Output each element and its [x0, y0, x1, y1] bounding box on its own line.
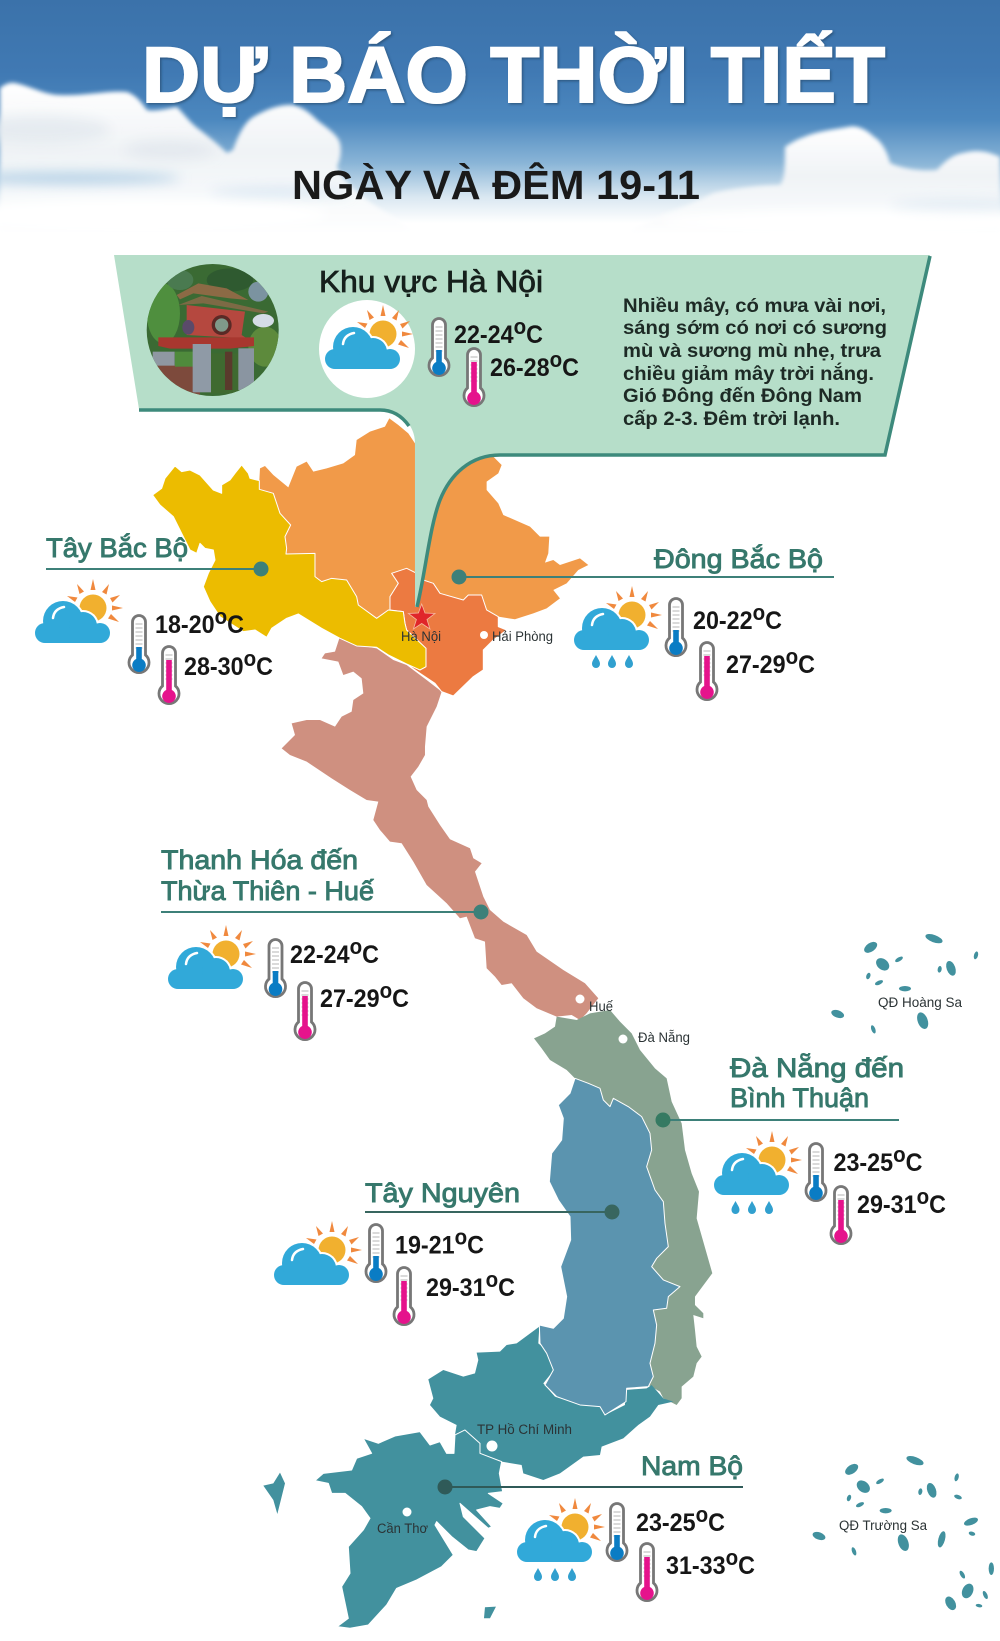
forecast description: sáng sớm có nơi có sương [623, 317, 887, 339]
temperature high: o [550, 347, 562, 372]
temperature low: o [753, 600, 765, 625]
temperature low: C [227, 611, 244, 639]
temperature low: o [696, 1502, 708, 1527]
heading line 2: Bình Thuận [730, 1083, 869, 1113]
city labels and markers [377, 629, 962, 1536]
temperature high: 29-31 [857, 1191, 921, 1219]
icon: cloud, sun and rain [574, 586, 662, 668]
region: Đông Nam Bộ [428, 1327, 673, 1480]
temperature low: 22-24 [290, 941, 354, 969]
temperature high: 27-29 [320, 985, 384, 1013]
island: Phú Quốc [263, 1473, 285, 1514]
region: Đông Bắc Bộ east [417, 457, 588, 619]
temperature low: o [215, 604, 227, 629]
temperature high: 31-33 [666, 1552, 730, 1580]
city labels and markers: Hà Nội [401, 629, 441, 644]
forecast description: Gió Đông đến Đông Nam [623, 385, 862, 407]
region: Tây Bắc Bộ [153, 465, 426, 670]
panel: Tây Nguyên [274, 1178, 620, 1325]
panel: Đà Nẵng đến Bình Thuận [656, 1052, 946, 1244]
icon: cloud, sun and rain [714, 1131, 802, 1214]
icon: cloud and sun [274, 1221, 362, 1285]
temperature low: C [765, 607, 782, 635]
temperature low: 23-25 [834, 1149, 897, 1177]
islands: Hoàng Sa [830, 932, 979, 1034]
thermometer: low [666, 598, 686, 656]
heading line 2: Thừa Thiên - Huế [161, 876, 374, 906]
title: DỰ BÁO THỜI TIẾT [142, 30, 885, 119]
temperature low: 19-21 [395, 1232, 459, 1260]
temperature low: 18-20 [155, 611, 219, 639]
region: Tây Nguyên [539, 1078, 680, 1415]
temperature high: 26-28 [490, 354, 554, 382]
icon: cloud, sun and rain [517, 1498, 605, 1581]
temperature low: o [455, 1224, 467, 1250]
temperature high: o [486, 1267, 498, 1292]
thermometer: high [394, 1268, 414, 1325]
temperature high: C [929, 1191, 946, 1219]
leader line [161, 904, 488, 920]
thermometer: low [129, 616, 149, 673]
temperature low: C [526, 321, 543, 349]
city labels and markers: Cần Thơ [377, 1521, 428, 1536]
panel: Nam Bộ [438, 1451, 755, 1601]
icon: Hà Nội star [408, 604, 435, 629]
heading: Tây Nguyên [365, 1178, 520, 1208]
temperature high: C [562, 354, 579, 382]
forecast description: Nhiều mây, có mưa vài nơi, [623, 295, 886, 317]
temperature high: C [738, 1552, 755, 1580]
temperature low: 20-22 [693, 607, 757, 635]
temperature low: 22-24 [454, 321, 518, 349]
temperature high: 29-31 [426, 1274, 490, 1302]
thermometer: low [429, 318, 449, 376]
thermometer: high [464, 348, 484, 406]
leader line [452, 570, 834, 584]
temperature high: o [244, 646, 256, 671]
heading: Tây Bắc Bộ [46, 532, 188, 563]
thermometer: high [159, 646, 179, 704]
islands: Trường Sa [811, 1454, 994, 1612]
temperature low: o [350, 934, 362, 959]
forecast description: chiều giảm mây trời nắng. [623, 361, 874, 385]
temperature high: o [380, 978, 392, 1003]
sky background with clouds [0, 0, 1000, 240]
heading line 1: Đà Nẵng đến [730, 1052, 904, 1083]
thermometer: low [806, 1144, 826, 1201]
temperature high: o [917, 1184, 929, 1209]
subtitle: NGÀY VÀ ĐÊM 19-11 [292, 162, 700, 208]
heading: Đông Bắc Bộ [654, 543, 823, 574]
thermometer: high [831, 1186, 851, 1244]
forecast description: cấp 2-3. Đêm trời lạnh. [623, 408, 840, 430]
icon: cloud and sun [35, 579, 123, 643]
panel: Tây Bắc Bộ [35, 532, 273, 704]
city labels and markers: Hải Phòng [492, 629, 553, 644]
temperature low: o [893, 1142, 906, 1167]
icon: cloud and sun [168, 925, 256, 989]
forecast description: mù và sương mù nhẹ, trưa [623, 340, 881, 362]
region: Thanh Hoá to Huế [282, 638, 598, 1020]
forecast description [623, 295, 887, 430]
thermometer: high [697, 642, 717, 700]
city labels and markers: TP Hồ Chí Minh [477, 1422, 572, 1437]
region: Đồng bằng Bắc Bộ [390, 568, 507, 696]
icon: white disc with cloud and sun [319, 300, 415, 398]
temperature low: C [362, 941, 379, 969]
temperature low: 23-25 [636, 1509, 700, 1537]
region: Nam Bộ Mekong delta [315, 1430, 503, 1628]
city labels and markers: Huế [589, 999, 613, 1014]
temperature low: C [467, 1232, 484, 1260]
temperature low: C [906, 1149, 922, 1177]
temperature high: C [256, 653, 273, 681]
leader line [365, 1204, 620, 1220]
thermometer: high [295, 982, 315, 1040]
panel: Đông Bắc Bộ [452, 543, 834, 700]
temperature high: 27-29 [726, 651, 790, 679]
heading: Khu vực Hà Nội: Khu vực Hà Nội [319, 264, 543, 299]
leader line [46, 562, 268, 576]
region: Đông Bắc Bộ west [259, 418, 415, 618]
region: Đà Nẵng to Bình Thuận [534, 1010, 712, 1405]
temperature high: C [392, 985, 409, 1013]
panel: Thanh Hóa đến Thừa Thiên - Huế [161, 845, 488, 1040]
thermometer: high [637, 1544, 657, 1601]
heading line 1: Thanh Hóa đến [161, 845, 358, 875]
temperature low: C [708, 1509, 725, 1537]
map of Vietnam [153, 418, 712, 1628]
heading: Nam Bộ [641, 1451, 743, 1481]
leader line [438, 1480, 743, 1494]
temperature high: o [726, 1545, 738, 1570]
temperature high: o [786, 644, 798, 669]
temperature high: C [498, 1274, 515, 1302]
photo: Khuê Văn Các pavilion [146, 264, 279, 396]
city labels and markers: Đà Nẵng [638, 1030, 690, 1045]
island: Côn Đảo [484, 1607, 496, 1618]
thermometer: low [607, 1504, 627, 1561]
thermometer: low [266, 940, 286, 997]
city labels and markers: QĐ Trường Sa [839, 1518, 927, 1533]
city labels and markers: QĐ Hoàng Sa [878, 995, 962, 1010]
temperature high: C [798, 651, 815, 679]
panel: Khu vực Hà Nội callout [114, 255, 930, 607]
temperature low: o [514, 314, 526, 339]
thermometer: low [366, 1224, 386, 1282]
temperature high: 28-30 [184, 653, 248, 681]
leader line [656, 1112, 899, 1128]
